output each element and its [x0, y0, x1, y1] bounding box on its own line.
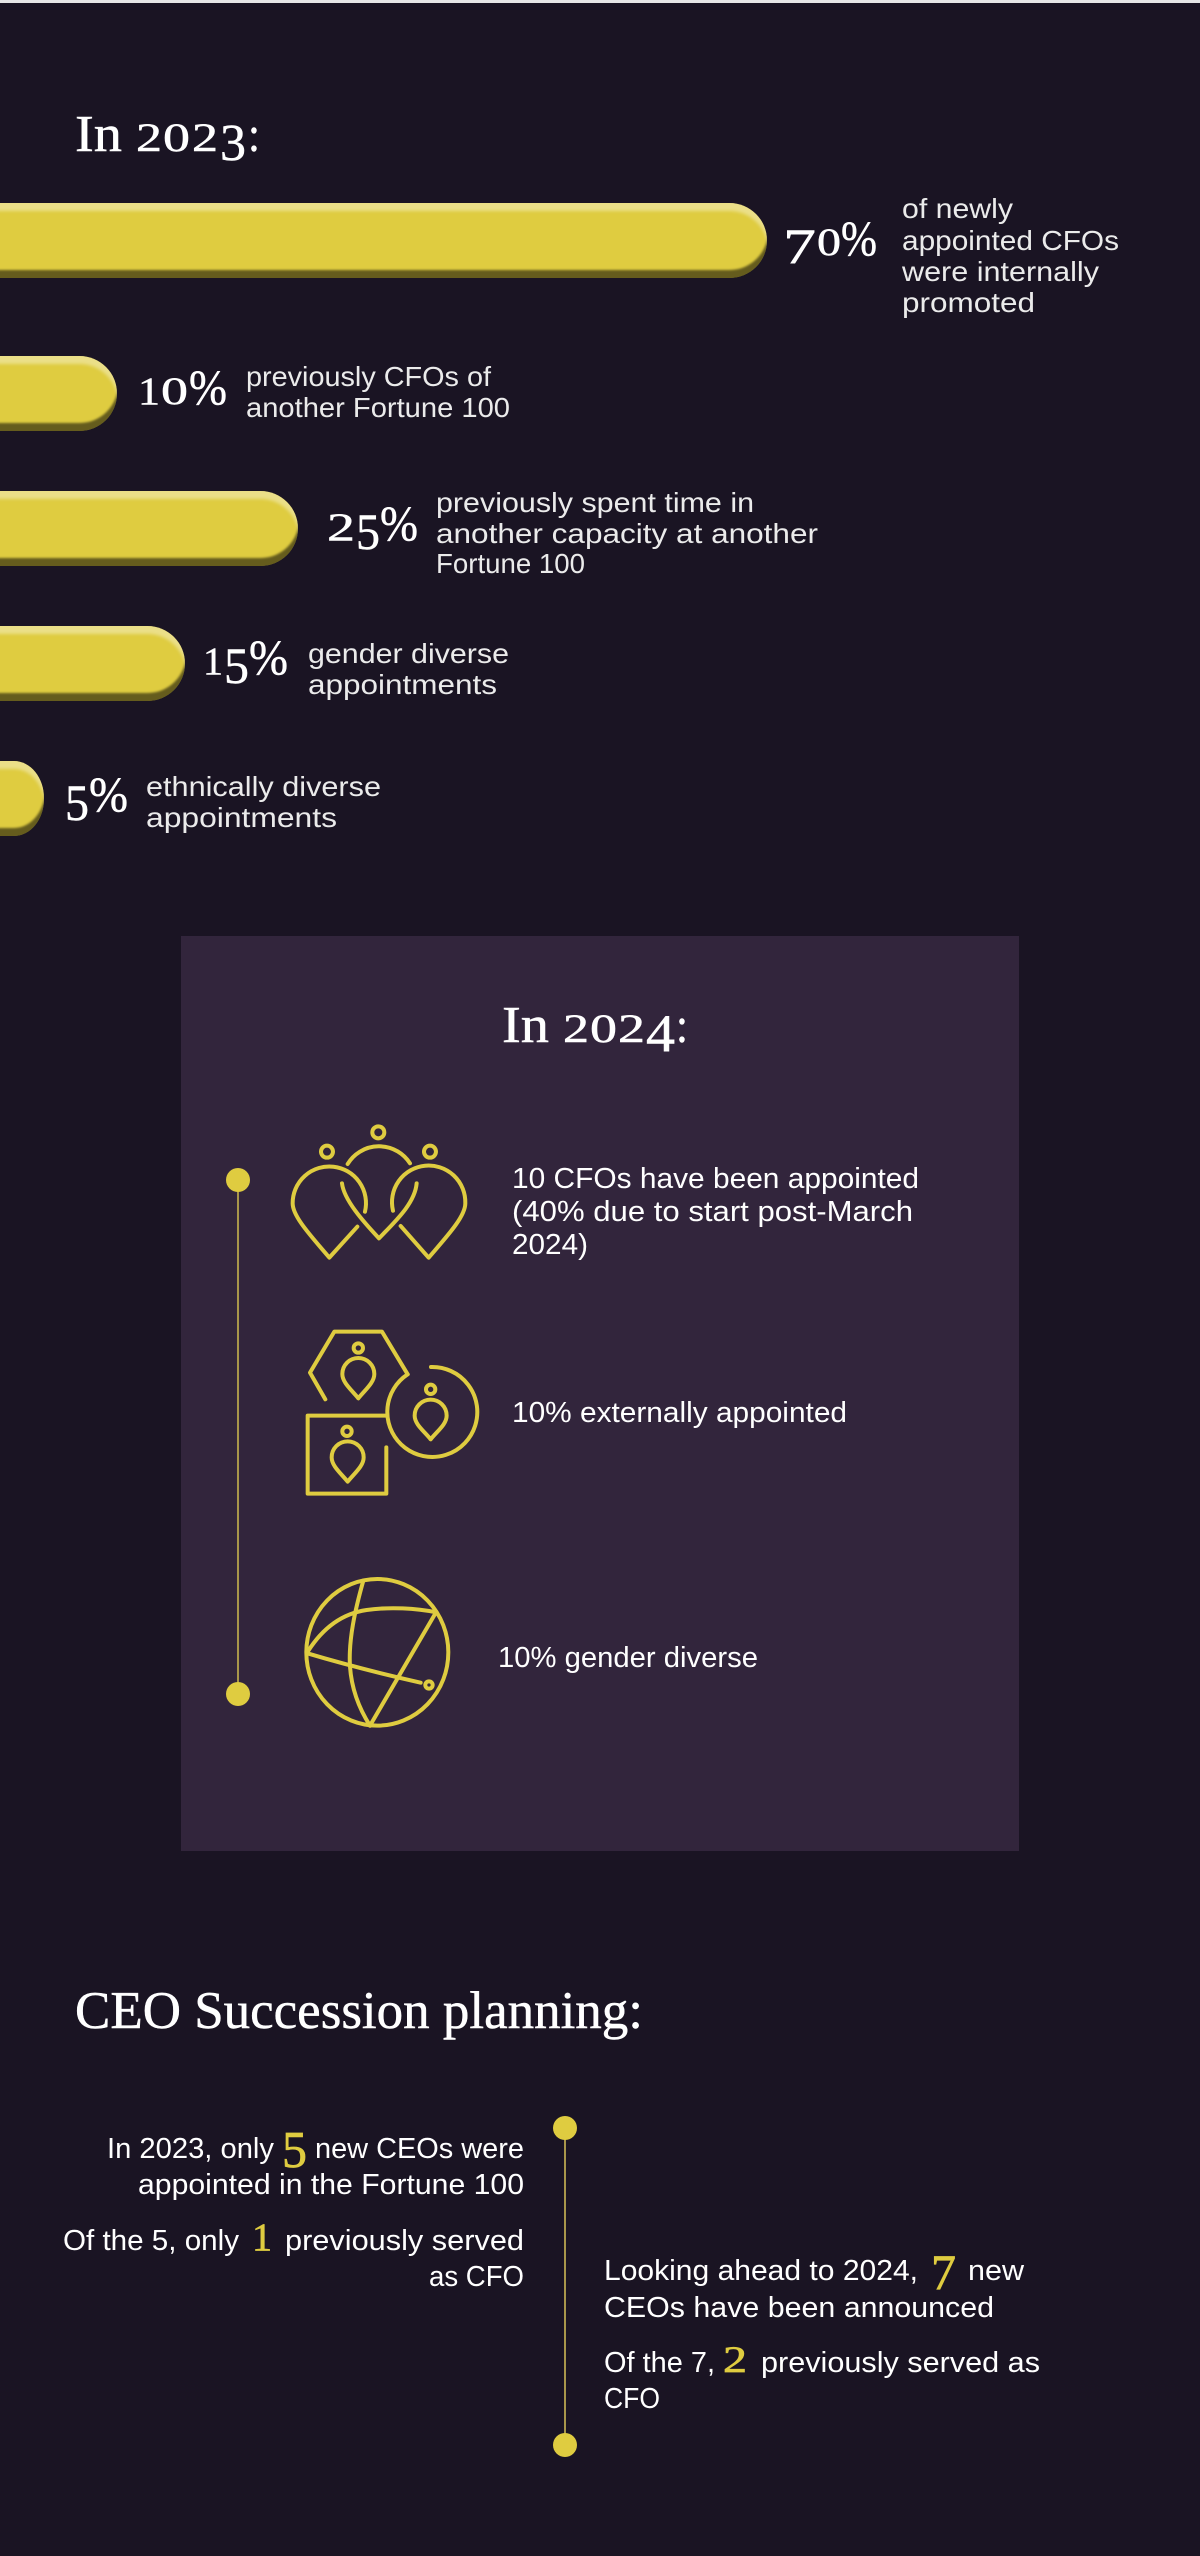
- value and label: 70%: 0: [817, 221, 841, 264]
- text block: 2024 CEOs: 2: [723, 2340, 747, 2381]
- value and label: 25%: [327, 487, 818, 579]
- text block: 2023 CEOs: new CEOs were: [315, 2133, 524, 2165]
- value and label: 70%: were internally: [901, 256, 1099, 287]
- value and label: 15%: %: [249, 629, 288, 685]
- text block: 2023 CEOs: appointed in the Fortune 100: [138, 2169, 524, 2201]
- value and label: 70%: appointed CFOs: [902, 225, 1119, 256]
- value and label: 70%: 7: [783, 218, 816, 274]
- heading: In 2023: :: [248, 106, 260, 162]
- text block: 2024 CEOs: Looking ahead to 2024,: [604, 2255, 918, 2287]
- value and label: 5%: ethnically diverse: [146, 771, 381, 802]
- text block: 2023 CEOs: previously served: [285, 2225, 524, 2257]
- heading: In 2023: [75, 106, 260, 172]
- value and label: 70%: promoted: [902, 287, 1035, 318]
- text block: 2024 CEOs: 7: [931, 2244, 956, 2300]
- bar: 5%: [0, 761, 44, 836]
- value and label: 15%: [203, 629, 509, 700]
- value and label: 10%: 1: [138, 370, 160, 413]
- bar: 10%: [0, 356, 117, 431]
- value and label: 10%: %: [189, 359, 227, 415]
- row: 10% previously CFOs: [0, 356, 510, 431]
- value and label: 15%: 5: [224, 639, 249, 695]
- value and label: 5%: [65, 766, 381, 833]
- icon: globe: [306, 1579, 448, 1726]
- value and label: 5%: %: [89, 766, 128, 822]
- panel: In 2024: [181, 936, 1019, 1851]
- heading: In 2023: 3: [220, 115, 246, 172]
- icon: pins in shapes: [308, 1332, 477, 1494]
- value and label: 10%: 0: [161, 370, 188, 413]
- text block: 2024 CEOs: [604, 2244, 1040, 2415]
- heading: In 2024: :: [676, 997, 688, 1053]
- text block: 2023 CEOs: [63, 2122, 524, 2293]
- value and label: 15%: 1: [203, 640, 223, 683]
- section: In 2023: [0, 106, 1119, 836]
- value and label: 10%: [138, 359, 510, 423]
- text: gender diverse: 10% gender diverse: [498, 1642, 758, 1674]
- heading: In 2024: In: [502, 997, 549, 1054]
- value and label: 70%: [783, 193, 1119, 318]
- heading: In 2023: 2: [136, 115, 162, 160]
- bar: 70%: [0, 203, 767, 278]
- value and label: 10%: previously CFOs of: [246, 361, 491, 392]
- value and label: 25%: %: [380, 495, 418, 551]
- text block: 2023 CEOs: as CFO: [429, 2261, 524, 2293]
- value and label: 15%: gender diverse: [308, 638, 509, 669]
- section: CEO Succession planning: [63, 1982, 1040, 2457]
- value and label: 25%: previously spent time in: [436, 487, 754, 518]
- value and label: 15%: appointments: [308, 669, 497, 700]
- row: 70% internally promoted: [0, 193, 1119, 318]
- text block: 2023 CEOs: In 2023, only: [107, 2133, 274, 2165]
- heading: In 2024: 4: [646, 1005, 675, 1063]
- timeline: [553, 2116, 577, 2457]
- icon: three linked pins: [293, 1126, 465, 1258]
- text block: 2024 CEOs: CEOs have been announced: [604, 2292, 994, 2324]
- value and label: 5%: appointments: [146, 802, 337, 833]
- value and label: 10%: another Fortune 100: [246, 392, 510, 423]
- text: 10 CFOs appointed: 10 CFOs have been appointed: [512, 1163, 919, 1195]
- text block: 2024 CEOs: previously served as: [761, 2347, 1040, 2379]
- heading: In 2024: 2: [563, 1006, 589, 1051]
- text: 10 CFOs appointed: 2024): [512, 1229, 588, 1261]
- text block: 2024 CEOs: Of the 7,: [604, 2347, 715, 2379]
- text block: 2024 CEOs: new: [968, 2255, 1025, 2287]
- timeline: [226, 1168, 250, 1706]
- value and label: 25%: 5: [356, 505, 380, 561]
- heading: In 2023: 0: [163, 115, 190, 160]
- text: externally appointed: 10% externally appointed: [512, 1397, 847, 1429]
- heading: In 2023: In: [75, 106, 122, 163]
- value and label: 25%: another capacity at another: [436, 518, 818, 549]
- row: 25% another capacity: [0, 487, 818, 579]
- heading: In 2024: 0: [590, 1006, 617, 1051]
- text block: 2024 CEOs: CFO: [604, 2383, 660, 2415]
- text block: 2023 CEOs: 5: [282, 2122, 307, 2179]
- text block: 2023 CEOs: 1: [252, 2216, 272, 2259]
- row: 5% ethnically diverse: [0, 761, 381, 836]
- heading: CEO Succession planning: CEO Succession planning:: [75, 1982, 643, 2040]
- value and label: 25%: 2: [327, 506, 355, 549]
- heading: In 2023: 2: [192, 115, 218, 160]
- text: 10 CFOs appointed: (40% due to start post-March: [512, 1196, 913, 1228]
- text block: 2023 CEOs: Of the 5, only: [63, 2225, 239, 2257]
- value and label: 25%: Fortune 100: [436, 548, 585, 579]
- bar: 15%: [0, 626, 185, 701]
- value and label: 5%: 5: [65, 776, 89, 832]
- text: 10 CFOs appointed: [512, 1163, 919, 1261]
- value and label: 70%: of newly: [902, 193, 1013, 224]
- value and label: 70%: %: [841, 210, 877, 266]
- heading: In 2024: 2: [618, 1006, 645, 1051]
- bar: 25%: [0, 491, 298, 566]
- row: 15% gender diverse: [0, 626, 509, 701]
